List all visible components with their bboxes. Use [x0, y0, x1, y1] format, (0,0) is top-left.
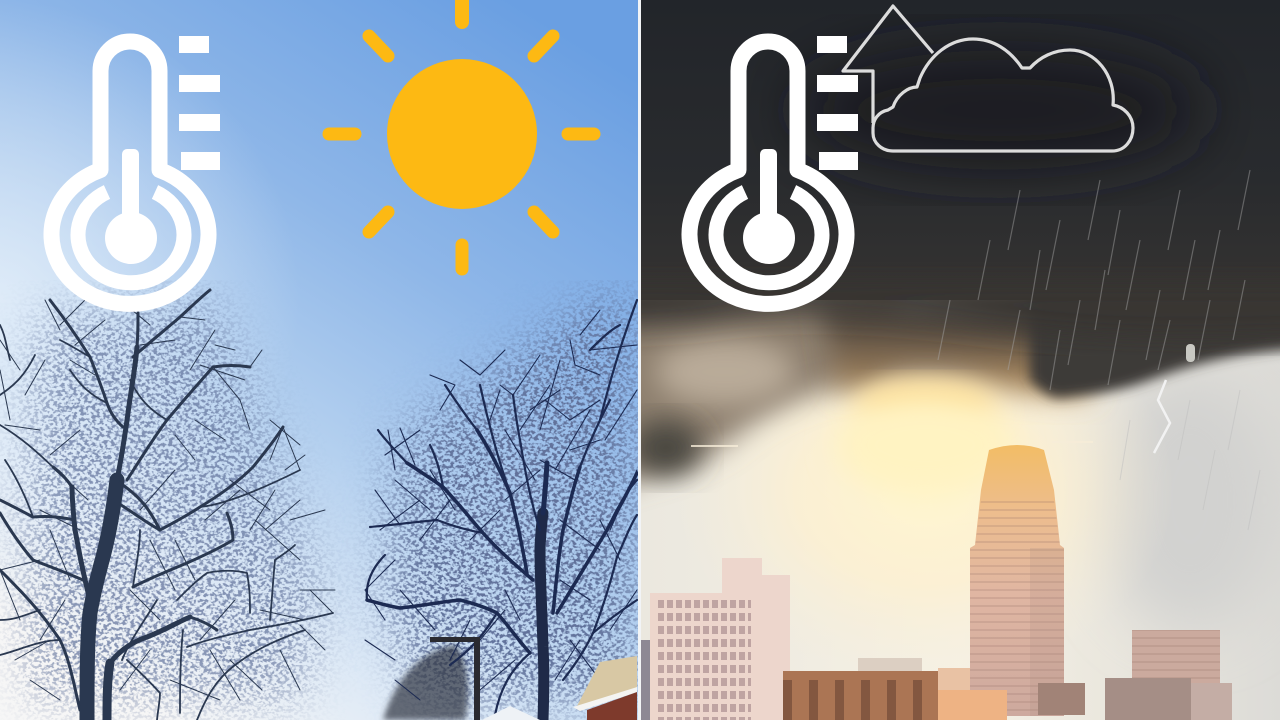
peach low blocks	[938, 668, 970, 690]
left tree crown texture	[25, 300, 320, 700]
bright lower sky	[641, 346, 1280, 720]
far left edge building	[641, 640, 650, 720]
lightning	[1154, 380, 1170, 453]
icon: arrow up and cloud	[843, 6, 1133, 151]
utility pole	[430, 637, 480, 720]
right block	[1132, 630, 1220, 683]
brown left cloud	[641, 300, 884, 498]
light flare streaks	[691, 445, 738, 447]
small dark tree	[383, 645, 468, 720]
panel: clear sky	[0, 0, 638, 720]
storm clouds	[600, 0, 1280, 490]
rain streaks	[938, 170, 1250, 390]
right dark cloud tail	[1030, 290, 1280, 398]
small bright spot	[1186, 344, 1195, 362]
right tree crown texture	[385, 300, 636, 700]
sun core	[855, 383, 995, 427]
bare tree right	[365, 300, 637, 720]
snow roof	[482, 706, 540, 720]
bare tree left	[0, 290, 335, 720]
city buildings	[641, 445, 1232, 720]
brick building	[783, 671, 938, 720]
icon: sun	[329, 0, 594, 269]
main dark cloud	[641, 0, 1280, 300]
central warm cloud base	[820, 300, 1090, 396]
red house roof	[573, 656, 637, 720]
grey rain haze	[1106, 376, 1264, 628]
main tower	[970, 445, 1064, 716]
sun glow	[765, 400, 1140, 619]
icon: thermometer dark	[689, 36, 858, 304]
panel: storm city	[600, 0, 1280, 720]
back roof	[858, 658, 922, 672]
panel divider	[638, 0, 641, 720]
icon: thermometer light	[52, 36, 220, 304]
left office block	[650, 558, 790, 720]
tower annex	[1038, 683, 1085, 715]
sky background	[0, 0, 638, 720]
